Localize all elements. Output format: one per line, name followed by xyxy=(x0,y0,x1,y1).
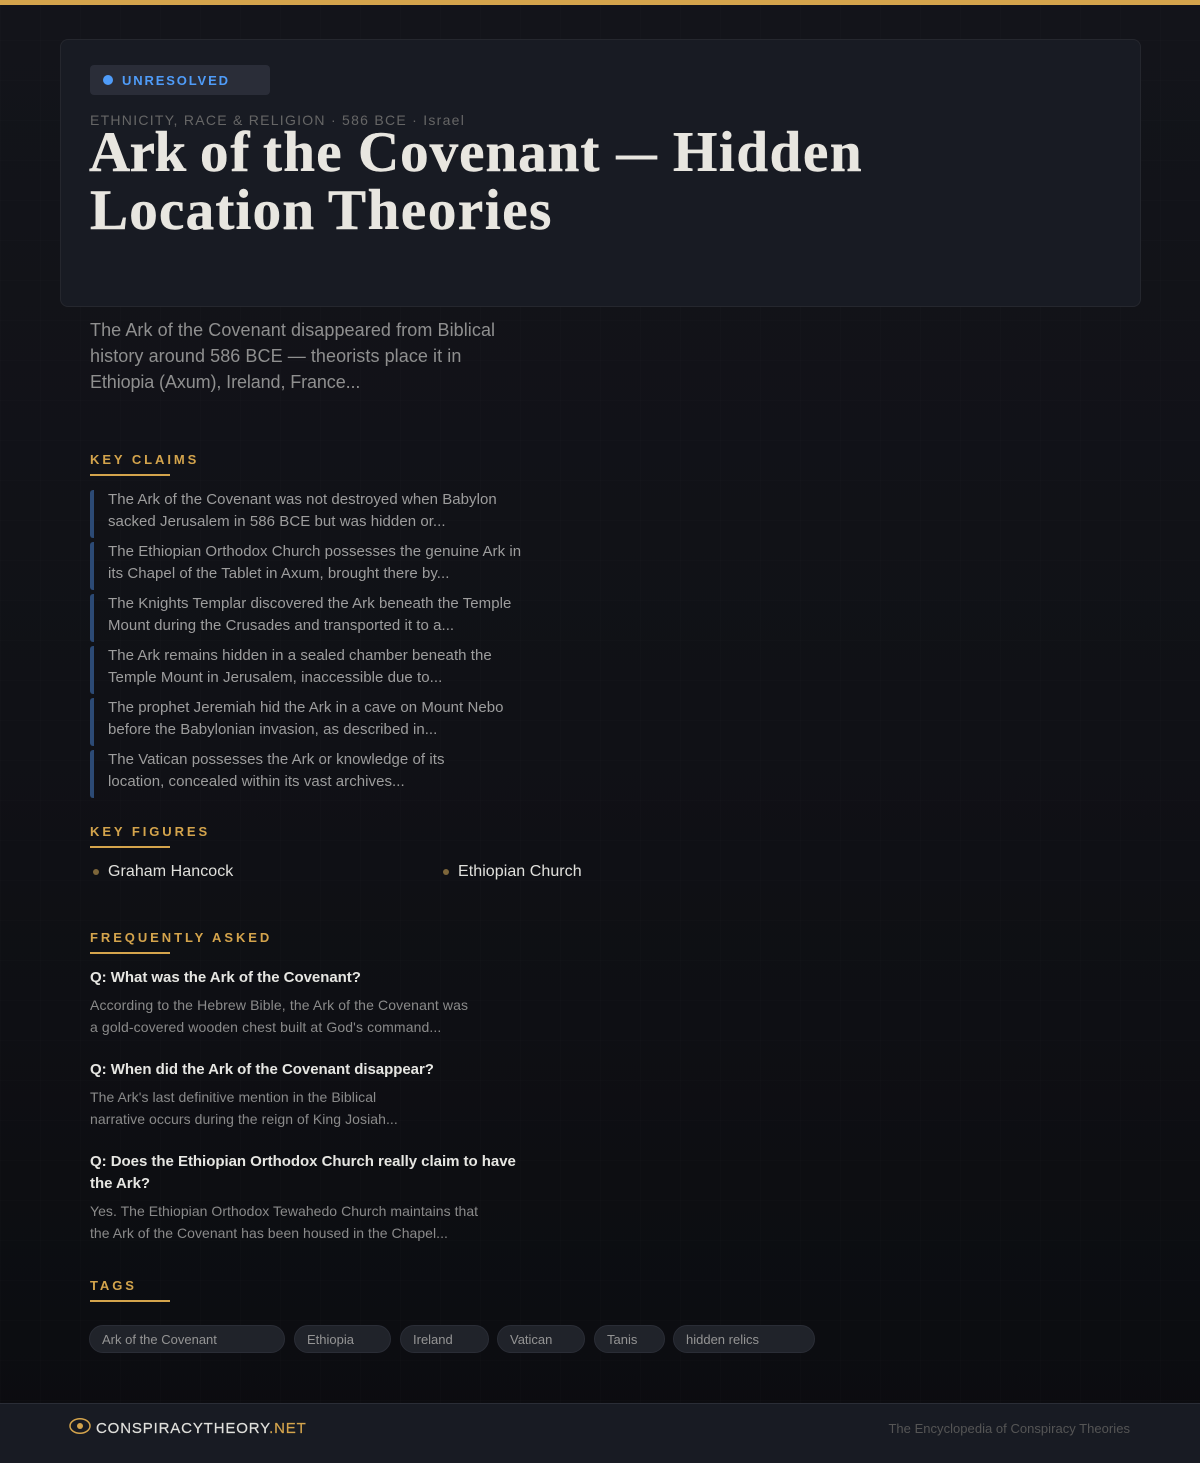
claim 1: The Ark of the Covenant was not destroyed when Babylon xyxy=(108,491,497,508)
claim 4 xyxy=(90,646,530,694)
title: — xyxy=(616,121,657,184)
claim 2 xyxy=(90,542,530,590)
question 3: the Ark? xyxy=(90,1175,150,1192)
answer 2: The Ark's last definitive mention in the Biblical xyxy=(90,1089,376,1105)
category meta line: ETHNICITY, RACE & RELIGION · 586 BCE · Israel xyxy=(90,112,465,128)
status dot xyxy=(103,75,113,85)
question 3 xyxy=(90,1153,516,1192)
tag xyxy=(294,1325,391,1353)
answer 3: the Ark of the Covenant has been housed in the Chapel... xyxy=(90,1225,448,1241)
status label: UNRESOLVED xyxy=(122,73,230,88)
claim 4: The Ark remains hidden in a sealed chamber beneath the xyxy=(108,647,492,664)
title: Covenant xyxy=(358,121,600,184)
answer 2: narrative occurs during the reign of King Josiah... xyxy=(90,1111,398,1127)
title: Location xyxy=(90,179,315,242)
intro text xyxy=(90,320,495,392)
heading: tags: TAGS xyxy=(90,1278,137,1293)
answer 1: According to the Hebrew Bible, the Ark of the Covenant was xyxy=(90,997,468,1013)
answer 1 xyxy=(90,997,468,1035)
heading: frequently asked: FREQUENTLY ASKED xyxy=(90,930,272,945)
tag: Tanis xyxy=(607,1332,637,1347)
claim 6 xyxy=(90,750,530,798)
title xyxy=(89,121,863,242)
tag xyxy=(89,1325,285,1353)
question 2: Q: When did the Ark of the Covenant disappear? xyxy=(90,1061,434,1078)
title: Theories xyxy=(328,179,553,242)
question 1: Q: What was the Ark of the Covenant? xyxy=(90,969,361,986)
panel: hero header xyxy=(60,39,1141,307)
claim 1 xyxy=(90,490,530,538)
question 3: Q: Does the Ethiopian Orthodox Church really claim to have xyxy=(90,1153,516,1170)
intro text: The Ark of the Covenant disappeared from Biblical xyxy=(90,320,495,340)
footer xyxy=(0,1403,1200,1463)
claim 5: before the Babylonian invasion, as described in... xyxy=(108,721,437,738)
footer tagline: The Encyclopedia of Conspiracy Theories xyxy=(888,1421,1130,1436)
status badge xyxy=(90,65,270,95)
claim 5 xyxy=(90,698,530,746)
figure: Graham Hancock: Graham Hancock xyxy=(108,863,233,880)
tag: Ethiopia xyxy=(307,1332,354,1347)
heading: key figures: KEY FIGURES xyxy=(90,824,210,839)
intro text: history around 586 BCE — theorists place it in xyxy=(90,346,461,366)
tag: Vatican xyxy=(510,1332,552,1347)
claim 3: Mount during the Crusades and transported it to a... xyxy=(108,617,454,634)
title: Ark xyxy=(89,121,186,184)
heading: key claims: KEY CLAIMS xyxy=(90,452,199,467)
claim 2: The Ethiopian Orthodox Church possesses the genuine Ark in xyxy=(108,543,521,560)
title: of xyxy=(200,121,251,184)
tag xyxy=(673,1325,815,1353)
tag: Ireland xyxy=(413,1332,453,1347)
brand wordmark: CONSPIRACYTHEORY.NET xyxy=(96,1420,307,1437)
tag: hidden relics xyxy=(686,1332,759,1347)
top accent bar xyxy=(0,0,1200,5)
tag xyxy=(400,1325,489,1353)
title: the xyxy=(263,121,343,184)
tag xyxy=(594,1325,665,1353)
claim 5: The prophet Jeremiah hid the Ark in a cave on Mount Nebo xyxy=(108,699,504,716)
claim 3: The Knights Templar discovered the Ark beneath the Temple xyxy=(108,595,511,612)
title: Hidden xyxy=(673,121,863,184)
answer 1: a gold-covered wooden chest built at God's command... xyxy=(90,1019,441,1035)
tag: Ark of the Covenant xyxy=(102,1332,217,1347)
claim 2: its Chapel of the Tablet in Axum, brought there by... xyxy=(108,565,449,582)
claim 6: location, concealed within its vast archives... xyxy=(108,773,405,790)
answer 3 xyxy=(90,1203,478,1241)
icon: eye logo xyxy=(69,1418,91,1434)
claim 1: sacked Jerusalem in 586 BCE but was hidden or... xyxy=(108,513,446,530)
claim 6: The Vatican possesses the Ark or knowledge of its xyxy=(108,751,445,768)
figure: Ethiopian Church: Ethiopian Church xyxy=(458,863,582,880)
answer 3: Yes. The Ethiopian Orthodox Tewahedo Church maintains that xyxy=(90,1203,478,1219)
tag xyxy=(497,1325,585,1353)
claim 4: Temple Mount in Jerusalem, inaccessible due to... xyxy=(108,669,442,686)
claim 3 xyxy=(90,594,530,642)
intro text: Ethiopia (Axum), Ireland, France... xyxy=(90,372,360,392)
answer 2 xyxy=(90,1089,398,1127)
